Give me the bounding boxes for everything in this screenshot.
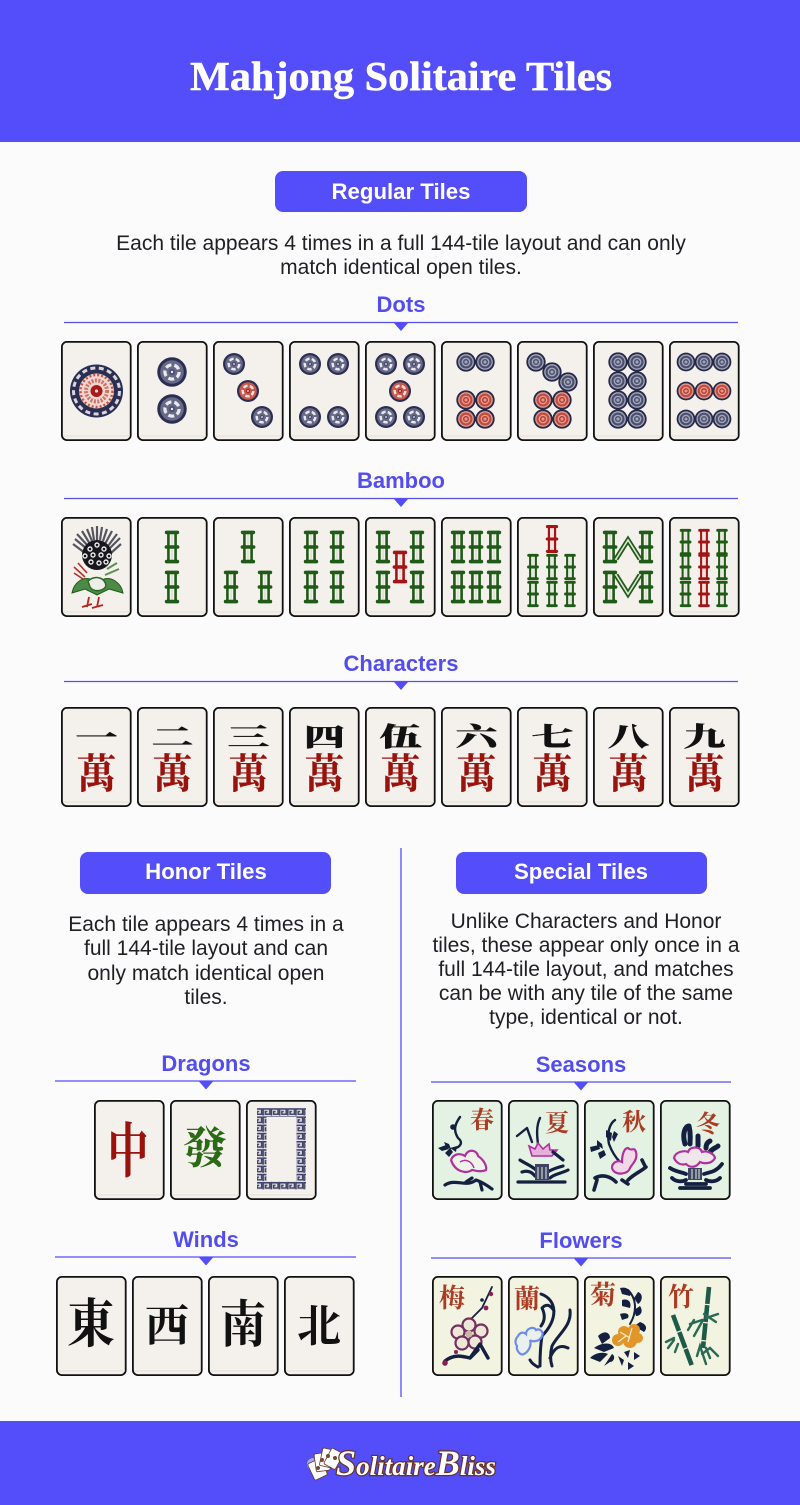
heading: Characters: Characters (344, 651, 458, 676)
tile: bamboo plant (661, 1277, 730, 1375)
heading: Dragons: Dragons (161, 1051, 251, 1076)
intro text (116, 232, 686, 279)
tile: character six (442, 708, 511, 806)
tile: summer: 夏 (545, 1110, 569, 1137)
tile: 4 bamboo (290, 518, 359, 616)
tile: 9 dots (670, 342, 739, 440)
icon: fan of cards (307, 1448, 344, 1480)
tile: character two: 二 (151, 724, 194, 752)
heading: Bamboo (64, 468, 738, 507)
tile: 1 dot (62, 342, 131, 440)
tile: character six: 萬 (456, 752, 497, 797)
special tiles text: tiles, these appear only once in a (432, 934, 740, 957)
honor tiles text (68, 913, 344, 1009)
tile: character four: 萬 (304, 752, 345, 797)
heading: Flowers: Flowers (539, 1228, 623, 1253)
tile: 2 bamboo (138, 518, 207, 616)
tile: character seven: 萬 (532, 752, 573, 797)
bamboo tile row (62, 518, 739, 616)
tile: spring: 春 (470, 1107, 494, 1134)
tile: 2 dots (138, 342, 207, 440)
section pill: Special Tiles (456, 852, 707, 894)
honor tiles text: full 144-tile layout and can (84, 937, 328, 960)
tile: chrysanthemum (585, 1277, 654, 1375)
heading: Seasons (431, 1052, 731, 1090)
flowers tile row (433, 1277, 730, 1375)
tile: 8 dots (594, 342, 663, 440)
special tiles text: type, identical or not. (489, 1006, 683, 1029)
special tiles text (432, 910, 740, 1029)
tile: south wind (209, 1277, 278, 1375)
tile: north wind (285, 1277, 354, 1375)
tile: green dragon: 發 (183, 1124, 227, 1173)
tile: character eight: 八 (608, 723, 650, 752)
tile: character eight: 萬 (608, 752, 649, 797)
heading: Winds (55, 1227, 356, 1266)
dots tile row (62, 342, 739, 440)
heading: Flowers (431, 1228, 731, 1266)
tile: west wind (133, 1277, 202, 1375)
tile: orchid (509, 1277, 578, 1375)
tile: orchid: 蘭 (514, 1285, 540, 1314)
tile: character seven: 七 (532, 723, 574, 752)
honor tiles text: Each tile appears 4 times in a (68, 913, 344, 936)
tile: red dragon: 中 (108, 1120, 148, 1186)
tile: character one: 萬 (76, 752, 117, 797)
tile: character nine: 九 (684, 723, 726, 752)
honor tiles text: tiles. (184, 986, 228, 1009)
tile: plum: 梅 (439, 1283, 465, 1313)
tile: winter (661, 1101, 730, 1199)
honor tiles text: only match identical open (88, 962, 324, 985)
heading: Seasons: Seasons (536, 1052, 626, 1077)
tile: 6 bamboo (442, 518, 511, 616)
tile: spring (433, 1101, 502, 1199)
tile: east wind (57, 1277, 126, 1375)
tile: character three (214, 708, 283, 806)
heading: Winds: Winds (173, 1227, 239, 1252)
dragons tile row (95, 1101, 316, 1199)
tile: summer (509, 1101, 578, 1199)
tile: character one (62, 708, 131, 806)
tile: west wind: 西 (145, 1302, 189, 1351)
special tiles text: can be with any tile of the same (439, 982, 733, 1005)
tile: bamboo plant: 竹 (668, 1283, 694, 1312)
winds tile row (57, 1277, 354, 1375)
seasons tile row (433, 1101, 730, 1199)
heading: Dots (64, 292, 738, 331)
tile: 3 bamboo (214, 518, 283, 616)
tile: green dragon (171, 1101, 240, 1199)
tile: 9 bamboo (670, 518, 739, 616)
tile: character five (366, 708, 435, 806)
footer banner (0, 1421, 800, 1505)
tile: character five: 伍 (380, 723, 422, 752)
tile: character one: 一 (75, 724, 118, 752)
tile: character four: 四 (303, 724, 346, 752)
tile: character five: 萬 (380, 752, 421, 797)
tile: 1 bamboo bird (62, 518, 131, 616)
section pill: Honor Tiles (80, 852, 331, 894)
heading: Dragons (55, 1051, 356, 1090)
tile: 4 dots (290, 342, 359, 440)
tile: 6 dots (442, 342, 511, 440)
characters tile row (62, 708, 739, 806)
tile: 5 dots (366, 342, 435, 440)
tile: character six: 六 (456, 723, 502, 752)
tile: winter: 冬 (696, 1111, 720, 1138)
section pill: Honor Tiles: Honor Tiles (145, 859, 267, 884)
title: Mahjong Solitaire Tiles (190, 53, 612, 99)
tile: south wind: 南 (220, 1297, 266, 1354)
tile: character two (138, 708, 207, 806)
intro text: Each tile appears 4 times in a full 144-tile layout and can only (116, 232, 686, 255)
tile: red dragon (95, 1101, 164, 1199)
tile: 7 bamboo (518, 518, 587, 616)
tile: character three: 萬 (228, 752, 269, 797)
tile: 8 bamboo (594, 518, 663, 616)
tile: character three: 三 (227, 724, 270, 752)
heading: Dots: Dots (377, 292, 425, 317)
tile: chrysanthemum: 菊 (590, 1281, 616, 1310)
tile: east wind: 東 (67, 1295, 115, 1354)
tile: autumn: 秋 (622, 1109, 646, 1136)
tile: autumn (585, 1101, 654, 1199)
tile: plum (433, 1277, 502, 1375)
tile: character nine: 萬 (684, 752, 725, 797)
section pill: Regular Tiles (275, 171, 527, 212)
logo wordmark: SolitaireBliss (336, 1443, 496, 1483)
tile: character eight (594, 708, 663, 806)
column divider (400, 848, 402, 1397)
tile: 3 dots (214, 342, 283, 440)
tile: 5 bamboo (366, 518, 435, 616)
tile: character nine (670, 708, 739, 806)
section pill: Regular Tiles: Regular Tiles (332, 179, 470, 204)
special tiles text: full 144-tile layout, and matches (438, 958, 734, 981)
intro text: match identical open tiles. (280, 256, 522, 279)
special tiles text: Unlike Characters and Honor (451, 910, 721, 933)
tile: character two: 萬 (152, 752, 193, 797)
heading: Bamboo: Bamboo (357, 468, 445, 493)
header banner (0, 0, 800, 142)
tile: 7 dots (518, 342, 587, 440)
heading: Characters (64, 651, 738, 690)
tile: character four (290, 708, 359, 806)
section pill: Special Tiles: Special Tiles (514, 859, 648, 884)
tile: white dragon frame (247, 1101, 316, 1199)
tile: character seven (518, 708, 587, 806)
tile: north wind: 北 (297, 1302, 341, 1351)
